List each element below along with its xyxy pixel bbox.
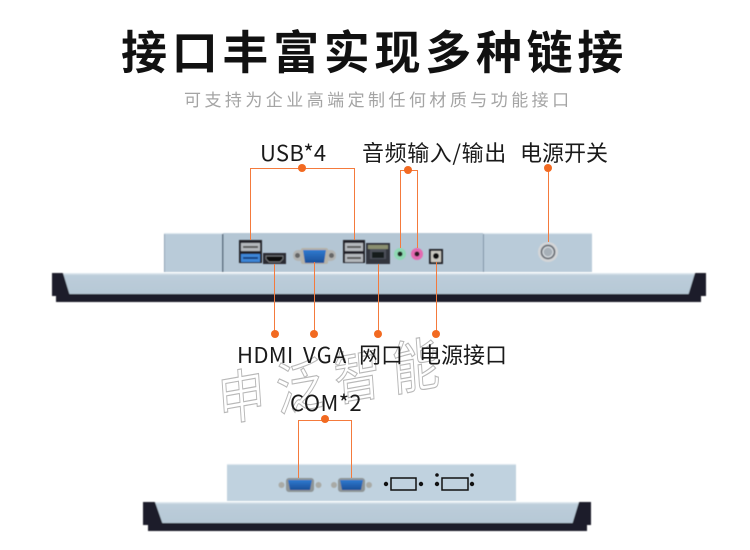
label: VGA: VGA [303, 338, 347, 370]
label: LAN: 网口 [359, 338, 403, 370]
top device: rear housing [164, 233, 592, 272]
label: power switch: 电源开关 [520, 136, 608, 168]
port: COM 2 [331, 478, 372, 492]
port: USB pair right [343, 240, 365, 263]
callout: HDMI line [271, 264, 279, 338]
port: HDMI [263, 253, 286, 264]
label: HDMI: HDMI [237, 338, 294, 370]
power switch [538, 242, 558, 262]
title: 接口丰富实现多种链接 [121, 17, 628, 83]
callout: audio bracket [400, 166, 418, 248]
label: audio in/out: 音频输入/输出 [362, 136, 507, 168]
port cutout: blank 1 [384, 478, 423, 490]
port: DC power [429, 249, 443, 264]
callout: DC line [432, 262, 440, 338]
port: USB pair left [239, 240, 262, 263]
callout: VGA line [310, 262, 318, 338]
watermark: 申泛智能 [215, 315, 453, 439]
label: power jack: 电源接口 [419, 338, 507, 370]
callout: LAN line [374, 264, 382, 338]
label: COM*2: COM*2 [290, 386, 362, 418]
subtitle: 可支持为企业高端定制任何材质与功能接口 [184, 86, 573, 111]
port: audio pink [411, 248, 423, 260]
label: USB*4: USB*4 [260, 136, 326, 168]
port cutout: blank 2 [435, 473, 474, 490]
callout: USB bracket [250, 164, 354, 240]
port: COM 1 [278, 478, 322, 492]
bottom device: front bezel [143, 502, 591, 531]
callout: power switch line [544, 164, 552, 242]
port: audio green [394, 248, 406, 260]
callout: COM bracket [298, 415, 352, 478]
port: RJ45 [366, 243, 390, 264]
port: VGA [293, 248, 336, 264]
top device: front bezel [52, 273, 706, 302]
bottom device: rear housing [227, 464, 516, 501]
